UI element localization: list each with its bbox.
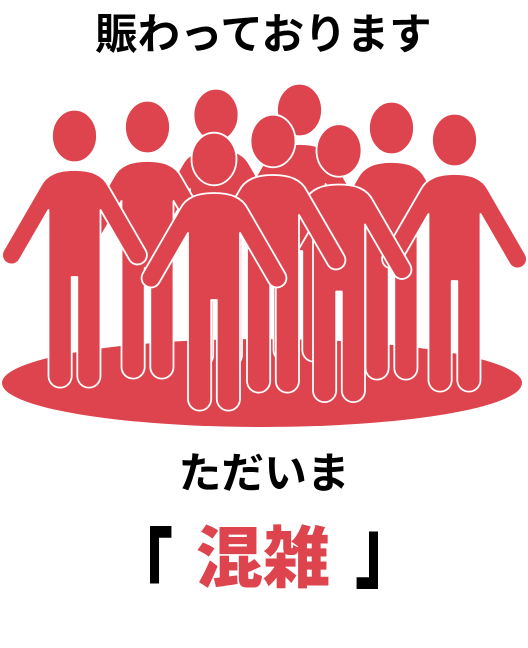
floor ellipse	[2, 339, 522, 427]
person: front right	[267, 124, 411, 402]
status: congested: 混雑	[196, 522, 330, 597]
person: far left	[2, 110, 147, 388]
status: closing bracket: 」	[355, 500, 418, 600]
people group	[2, 84, 527, 411]
person: far right	[382, 114, 527, 392]
person: front centre	[142, 133, 286, 411]
person: second from right	[319, 102, 464, 380]
title: 賑わっております	[95, 12, 432, 58]
subtitle: ただいま	[178, 450, 350, 498]
person: second from left	[75, 101, 220, 379]
person: back centre	[144, 89, 288, 367]
person: back right centre	[227, 84, 372, 362]
status: opening bracket: 「	[110, 523, 172, 623]
person: middle	[201, 115, 345, 393]
